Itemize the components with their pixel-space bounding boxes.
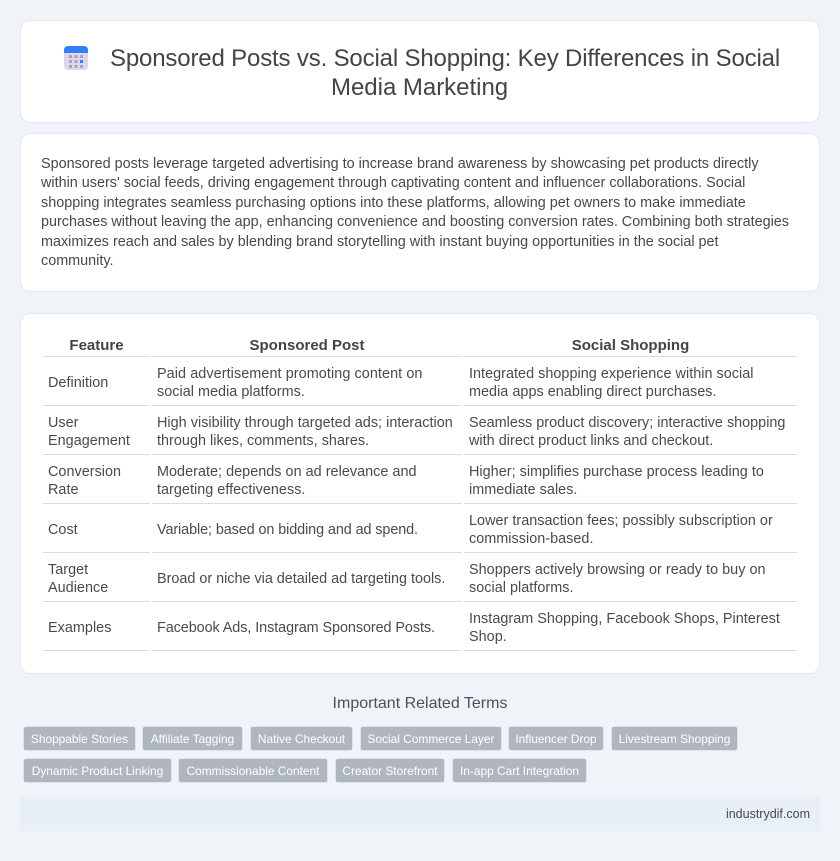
row: Examples	[43, 611, 797, 651]
table header row: Social Shopping	[572, 337, 689, 354]
row: Conversion Rate: Moderate; depends on ad relevance and	[157, 464, 417, 480]
tag row 2: Dynamic Product Linking	[32, 764, 163, 778]
row: Examples: Examples	[48, 620, 111, 636]
related terms heading: Important Related Terms	[333, 695, 507, 712]
row: Target Audience	[43, 562, 797, 602]
row: Target Audience: social platforms.	[469, 580, 573, 596]
row: Conversion Rate: immediate sales.	[469, 482, 577, 498]
related terms tags: Affiliate Tagging	[151, 732, 234, 746]
title	[110, 45, 780, 101]
tag row 1: Shoppable Stories	[31, 732, 128, 746]
row: Definition	[43, 366, 797, 406]
related terms tags: Influencer Drop	[515, 732, 597, 746]
related terms tags	[23, 726, 738, 783]
row: User Engagement: Seamless product discovery; interactive shopping	[469, 415, 785, 431]
table header row: Sponsored Post	[249, 337, 364, 354]
row: Target Audience: Broad or niche via detailed ad targeting tools.	[157, 571, 445, 587]
row: Target Audience: Audience	[48, 580, 108, 596]
footer bar	[20, 797, 820, 831]
title: Media Marketing	[331, 74, 508, 101]
row: Conversion Rate	[43, 464, 797, 504]
intro text panel	[20, 133, 820, 292]
row: Definition: Definition	[48, 375, 108, 391]
row: Conversion Rate: Higher; simplifies purchase process leading to	[469, 464, 764, 480]
row: Target Audience: Target	[48, 562, 88, 578]
intro paragraph: purchases without leaving the app, enhancing convenience and boosting conversion rates. Combining both strategies	[41, 214, 789, 230]
row: User Engagement: High visibility through targeted ads; interaction	[157, 415, 453, 431]
row: Conversion Rate: targeting effectiveness.	[157, 482, 305, 498]
related terms tags: Creator Storefront	[342, 764, 438, 778]
footer source text: industrydif.com	[726, 807, 810, 821]
table header row	[43, 337, 797, 357]
row: User Engagement: with direct product links and checkout.	[469, 433, 713, 449]
intro paragraph: maximizes reach and sales by blending brand storytelling with instant buying opportunities in the social pet	[41, 234, 719, 250]
row: User Engagement: Engagement	[48, 433, 130, 449]
row: Examples: Shop.	[469, 629, 507, 645]
row: Examples: Instagram Shopping, Facebook Shops, Pinterest	[469, 611, 780, 627]
row: Cost: Cost	[48, 522, 78, 538]
comparison table panel	[20, 313, 820, 674]
row: Definition: Integrated shopping experience within social	[469, 366, 754, 382]
related terms tags: Social Commerce Layer	[368, 732, 494, 746]
row: User Engagement: through likes, comments, shares.	[157, 433, 369, 449]
intro paragraph: Sponsored posts leverage targeted advertising to increase brand awareness by showcasing pet products directly	[41, 156, 759, 172]
tag row 2	[23, 758, 172, 783]
row: Conversion Rate: Rate	[48, 482, 79, 498]
row: User Engagement: User	[48, 415, 79, 431]
row: Examples: Facebook Ads, Instagram Sponsored Posts.	[157, 620, 435, 636]
related terms tags: Commissionable Content	[187, 764, 319, 778]
title: Sponsored Posts vs. Social Shopping: Key Differences in Social	[110, 45, 780, 72]
row: User Engagement	[43, 415, 797, 455]
related terms tags: In-app Cart Integration	[460, 764, 579, 778]
row: Cost	[43, 513, 797, 553]
header panel	[20, 20, 820, 123]
row: Cost: Variable; based on bidding and ad spend.	[157, 522, 418, 538]
row: Definition: media apps enabling direct purchases.	[469, 384, 717, 400]
tag row 1	[23, 726, 136, 751]
row: Target Audience: Shoppers actively browsing or ready to buy on	[469, 562, 766, 578]
table header row: Feature	[69, 337, 124, 354]
intro paragraph: shopping integrates seamless purchasing options into these platforms, allowing pet owners to make immediate	[41, 195, 746, 211]
related terms tags: Livestream Shopping	[619, 732, 730, 746]
intro paragraph: within users' social feeds, driving engagement through captivating content and influencer collaborations. Social	[41, 175, 745, 191]
row: Definition: Paid advertisement promoting content on	[157, 366, 423, 382]
intro paragraph: community.	[41, 253, 114, 269]
row: Definition: social media platforms.	[157, 384, 305, 400]
intro paragraph	[41, 156, 789, 269]
row: Conversion Rate: Conversion	[48, 464, 121, 480]
row: Cost: Lower transaction fees; possibly subscription or	[469, 513, 773, 529]
related terms tags: Native Checkout	[258, 732, 345, 746]
row: Cost: commission-based.	[469, 531, 593, 547]
comparison table	[43, 337, 797, 651]
icon: calendar	[64, 46, 88, 70]
